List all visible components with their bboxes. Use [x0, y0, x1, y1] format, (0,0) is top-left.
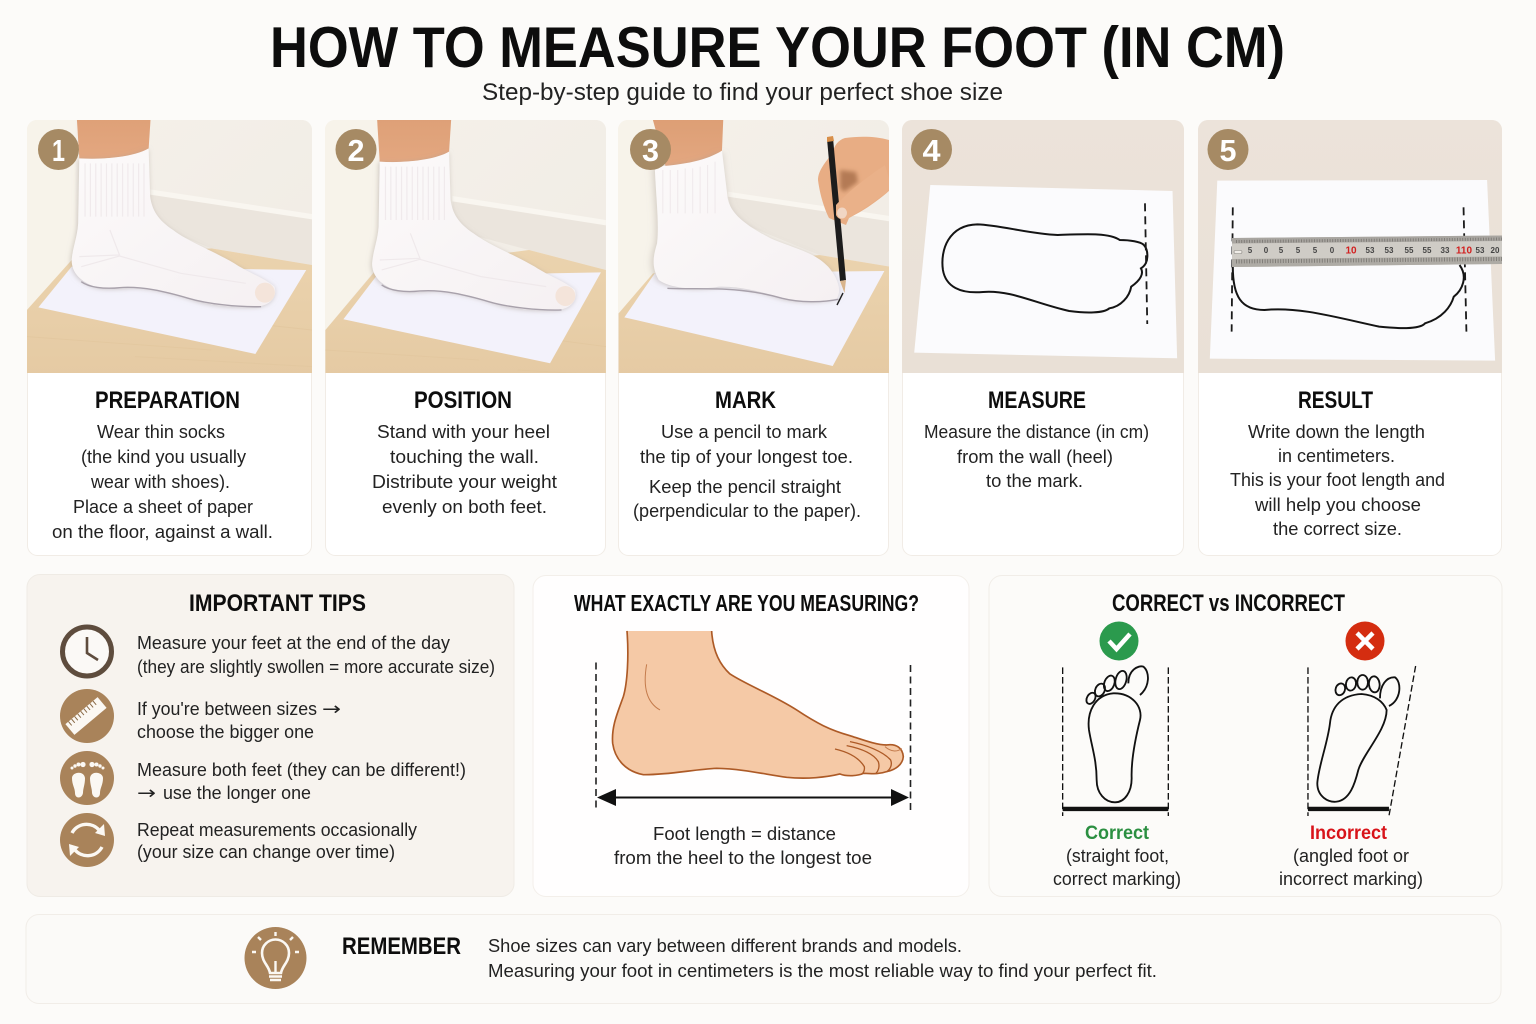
text block: from the wall (heel) — [957, 447, 1113, 467]
text block — [52, 422, 273, 542]
ruler: 53 — [1476, 246, 1485, 255]
title: HOW TO MEASURE YOUR FOOT (IN CM) — [270, 16, 1285, 80]
icon: clock — [62, 627, 112, 676]
icon: ruler — [60, 689, 114, 743]
icon: light bulb — [244, 927, 306, 989]
ruler: 10 — [1345, 246, 1357, 256]
measurement guides and arrow — [596, 662, 910, 812]
step number badge: 5 — [1220, 133, 1236, 168]
tip text: between sizes: If you're between sizes — [137, 699, 317, 719]
ruler: 55 — [1405, 246, 1414, 255]
photo: foot outline on paper — [902, 120, 1184, 373]
panel: step 3 mark — [610, 110, 897, 556]
label: correct — [1053, 823, 1181, 889]
text block: (the kind you usually — [81, 447, 246, 467]
heading: WHAT EXACTLY ARE YOU MEASURING? — [574, 590, 919, 616]
panel: step 1 preparation — [27, 120, 312, 556]
tip text: both feet: Measure both feet (they can be different!) — [137, 760, 466, 780]
tip text: between sizes — [137, 699, 341, 742]
text block: touching the wall. — [390, 447, 539, 467]
text block: on the floor, against a wall. — [52, 522, 273, 542]
incorrect foot outline — [1308, 666, 1416, 816]
ruler: 53 — [1366, 246, 1375, 255]
text block: Shoe sizes can vary between different brands and models. — [488, 936, 962, 956]
caption: from the heel to the longest toe — [614, 848, 872, 868]
step number badge: 2 — [348, 133, 364, 168]
ruler — [1232, 236, 1502, 267]
panel: remember — [26, 914, 1501, 1004]
icon: red cross — [1346, 622, 1384, 660]
label: correct: correct marking) — [1053, 869, 1181, 889]
ruler: 0 — [1264, 246, 1269, 255]
step number badge: 4 — [922, 133, 941, 168]
photo: marking the toe with a pencil — [618, 120, 889, 373]
hand holding pencil — [818, 136, 892, 305]
ruler: 55 — [1423, 246, 1432, 255]
ruler: 5 — [1279, 246, 1284, 255]
ruler: 110 — [1456, 246, 1473, 256]
heading: IMPORTANT TIPS — [189, 590, 366, 617]
heading: PREPARATION — [95, 387, 240, 414]
text block: Keep the pencil straight — [649, 477, 841, 497]
ruler: 5 — [1248, 246, 1253, 255]
caption: Foot length = distance — [653, 824, 836, 844]
text block: This is your foot length and — [1230, 470, 1445, 490]
foot illustration — [612, 631, 903, 778]
panel: step 2 position — [325, 120, 606, 556]
label: incorrect: (angled foot or — [1293, 846, 1409, 866]
photo: foot on paper by wall — [27, 120, 312, 373]
photo: ruler over foot outline — [1198, 120, 1502, 373]
text block: (perpendicular to the paper). — [633, 501, 861, 521]
step number badge — [38, 129, 79, 170]
text block: the correct size. — [1273, 519, 1402, 539]
icon: two feet — [60, 751, 114, 805]
tip text: repeat: (your size can change over time) — [137, 842, 395, 862]
text block: Stand with your heel — [377, 422, 550, 442]
panel: step 5 result — [1195, 110, 1517, 556]
text block: Distribute your weight — [372, 472, 557, 492]
text block — [633, 422, 861, 521]
text block: in centimeters. — [1278, 446, 1395, 466]
step number badge — [1208, 129, 1248, 170]
panel: what exactly are you measuring — [533, 576, 969, 896]
step number badge — [630, 129, 671, 170]
tip text: end of day — [137, 633, 495, 677]
tip text: repeat — [137, 820, 417, 862]
heading: CORRECT vs INCORRECT — [1112, 590, 1345, 617]
label: correct: (straight foot, — [1066, 846, 1169, 866]
text block: Use a pencil to mark — [661, 422, 828, 442]
label: incorrect: incorrect marking) — [1279, 869, 1423, 889]
text block: Measuring your foot in centimeters is the most reliable way to find your perfect fit. — [488, 961, 1157, 981]
text block — [372, 422, 557, 517]
label: incorrect: Incorrect — [1310, 823, 1388, 844]
heading: REMEMBER — [342, 933, 461, 960]
text block: Wear thin socks — [97, 422, 225, 442]
ruler: 33 — [1441, 246, 1450, 255]
correct foot outline — [1063, 666, 1168, 816]
tip text: both feet: use the longer one — [163, 783, 311, 803]
tip text: repeat: Repeat measurements occasionally — [137, 820, 417, 840]
text block: Write down the length — [1248, 422, 1425, 442]
ruler: 53 — [1385, 246, 1394, 255]
text block: Place a sheet of paper — [73, 497, 253, 517]
panel: step 4 measure — [897, 110, 1195, 556]
step number badge — [911, 129, 952, 170]
step number badge: 3 — [642, 133, 659, 168]
step number badge: 1 — [52, 133, 65, 168]
ruler: 5 — [1296, 246, 1301, 255]
tip text: between sizes: choose the bigger one — [137, 722, 314, 742]
text block: wear with shoes). — [90, 472, 230, 492]
ruler: 0 — [1330, 246, 1335, 255]
label: incorrect — [1279, 823, 1423, 889]
text block: the tip of your longest toe. — [640, 447, 853, 467]
icon: repeat arrows — [60, 813, 114, 867]
ruler: 5 — [1313, 246, 1318, 255]
icon: green check — [1100, 622, 1138, 660]
text block: evenly on both feet. — [382, 497, 547, 517]
text block: to the mark. — [986, 471, 1083, 491]
subtitle: Step-by-step guide to find your perfect shoe size — [482, 79, 1003, 106]
ruler: 20 — [1491, 246, 1500, 255]
step number badge — [336, 129, 376, 170]
heading: MEASURE — [988, 387, 1086, 414]
tip text: both feet: → — [137, 783, 156, 804]
text block — [1230, 422, 1445, 539]
heading: MARK — [715, 387, 777, 414]
heading: POSITION — [414, 387, 512, 414]
panel: important tips — [27, 574, 514, 896]
tip text: end of day: (they are slightly swollen = more accurate size) — [137, 657, 495, 677]
tip text: both feet — [137, 760, 466, 804]
text block — [488, 936, 1157, 981]
heading: RESULT — [1298, 387, 1373, 414]
panel: correct vs incorrect — [989, 576, 1502, 896]
tip text: between sizes: → — [322, 699, 341, 720]
text block: Measure the distance (in cm) — [924, 422, 1149, 442]
text block: will help you choose — [1254, 495, 1421, 515]
text block — [924, 422, 1149, 491]
photo: heel touching the wall — [325, 120, 606, 373]
tip text: end of day: Measure your feet at the end of the day — [137, 633, 450, 653]
caption — [614, 824, 872, 868]
label: correct: Correct — [1085, 823, 1150, 844]
